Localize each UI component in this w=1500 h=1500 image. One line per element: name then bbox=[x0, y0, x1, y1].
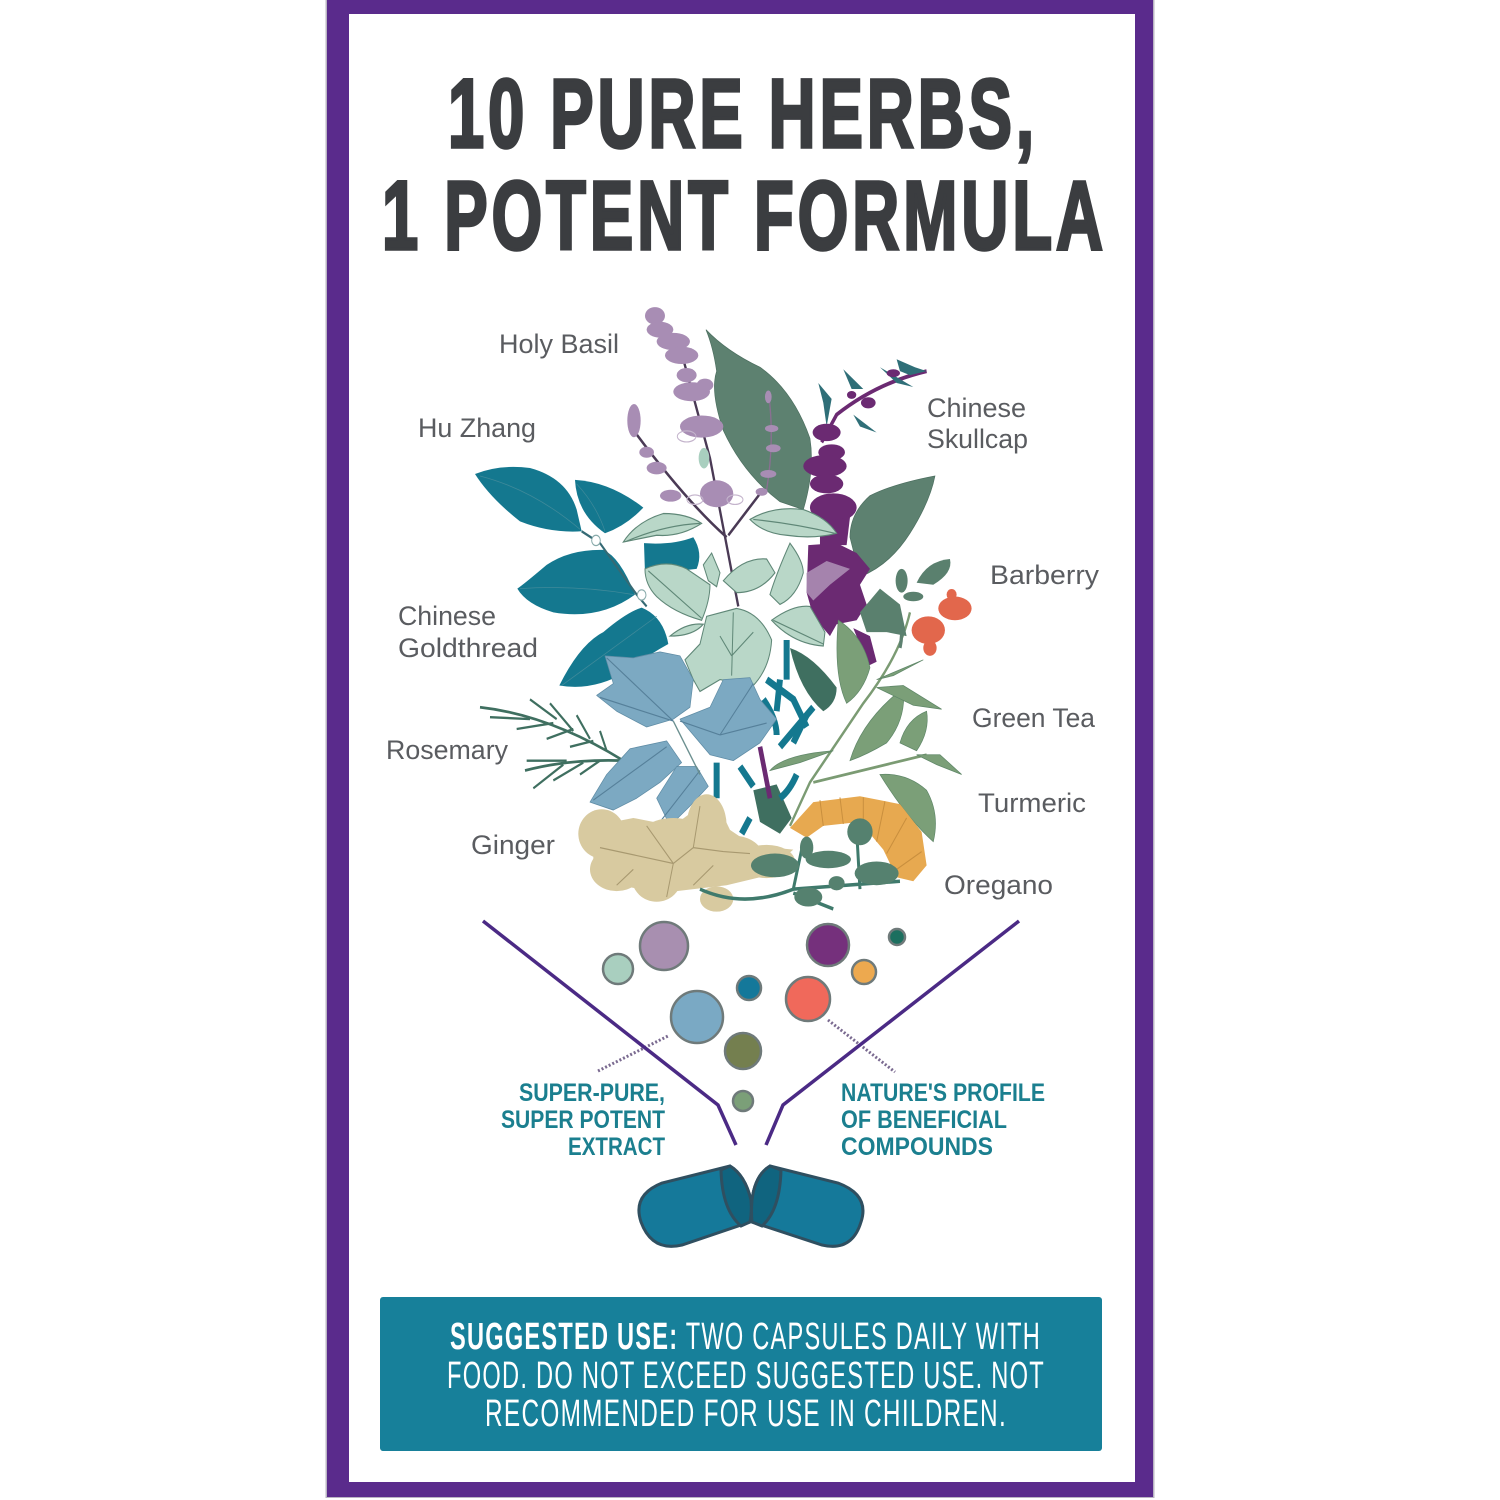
label: chinese skullcap: Chinese bbox=[927, 393, 1026, 423]
holy basil bbox=[627, 307, 781, 606]
herb illustration bbox=[475, 307, 972, 912]
label: chinese skullcap bbox=[927, 393, 1028, 454]
label: turmeric: Turmeric bbox=[978, 788, 1086, 818]
dark teal and green sprigs behind bbox=[717, 640, 837, 834]
callout: super-pure extract: SUPER-PURE, bbox=[519, 1079, 665, 1107]
compound circles bbox=[603, 922, 905, 1111]
title: 1 POTENT FORMULA bbox=[382, 161, 1107, 270]
label: chinese goldthread: Goldthread bbox=[398, 633, 538, 663]
callout: super-pure extract: SUPER POTENT bbox=[501, 1106, 665, 1134]
capsule bbox=[639, 1166, 863, 1246]
callout: nature's profile: COMPOUNDS bbox=[841, 1133, 993, 1161]
label: chinese goldthread bbox=[398, 601, 538, 663]
callout: nature's profile: NATURE'S PROFILE bbox=[841, 1079, 1045, 1107]
title: 10 PURE HERBS, bbox=[448, 59, 1038, 168]
label: oregano: Oregano bbox=[944, 870, 1053, 900]
rosemary bbox=[480, 699, 623, 788]
blue leaves bbox=[590, 652, 777, 826]
green tea leaves bbox=[770, 612, 962, 842]
suggested use box: RECOMMENDED FOR USE IN CHILDREN. bbox=[485, 1393, 1007, 1435]
label: hu zhang: Hu Zhang bbox=[418, 413, 536, 443]
callout: super-pure extract: EXTRACT bbox=[568, 1133, 665, 1161]
callout: nature's profile: OF BENEFICIAL bbox=[841, 1106, 1007, 1134]
barberry bbox=[860, 559, 972, 656]
label: barberry: Barberry bbox=[990, 560, 1100, 590]
label: rosemary: Rosemary bbox=[386, 735, 508, 765]
label: green tea: Green Tea bbox=[972, 703, 1096, 733]
suggested use box: FOOD. DO NOT EXCEED SUGGESTED USE. NOT bbox=[447, 1355, 1045, 1397]
mint-green leaves bbox=[623, 509, 837, 691]
label: holy basil: Holy Basil bbox=[499, 329, 619, 359]
ginger root bbox=[578, 794, 795, 912]
suggested use box: SUGGESTED USE: TWO CAPSULES DAILY WITH bbox=[450, 1316, 1041, 1358]
big sage leaves bbox=[706, 330, 935, 577]
callout: super-pure extract bbox=[501, 1079, 665, 1161]
chinese skullcap bbox=[803, 359, 927, 666]
turmeric root bbox=[790, 796, 927, 881]
purple frame bbox=[326, 0, 1154, 1498]
suggested use box bbox=[380, 1297, 1102, 1451]
callout: nature's profile bbox=[841, 1079, 1045, 1161]
label: ginger: Ginger bbox=[471, 830, 555, 860]
funnel lines bbox=[483, 921, 1019, 1145]
dotted callout lines bbox=[598, 1020, 895, 1072]
title bbox=[382, 59, 1107, 270]
oregano bbox=[700, 818, 900, 909]
label: chinese goldthread: Chinese bbox=[398, 601, 496, 631]
label: chinese skullcap: Skullcap bbox=[927, 424, 1028, 454]
herb labels bbox=[386, 329, 1100, 900]
hu zhang leaves bbox=[475, 467, 699, 687]
